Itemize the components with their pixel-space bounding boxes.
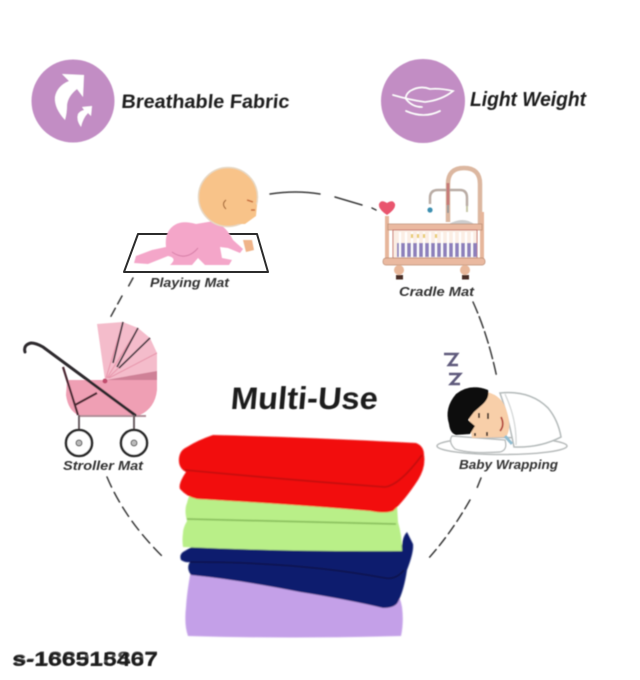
heading: multi-use: Multi-Use (229, 381, 379, 416)
red cloth (179, 435, 424, 512)
label: cradle mat: Cradle Mat (399, 284, 475, 299)
illustration: playing mat (124, 168, 268, 290)
green cloth (182, 490, 402, 551)
illustration: baby wrapping (437, 354, 567, 472)
feature: breathable fabric (32, 60, 291, 142)
heart (379, 201, 395, 215)
illustration: cradle mat (379, 168, 485, 299)
navy cloth (180, 532, 413, 608)
heading: breathable fabric: Breathable Fabric (121, 91, 291, 113)
heading: light weight: Light Weight (470, 89, 587, 111)
icon: breathable arrows (32, 60, 114, 142)
purple cloth (185, 565, 403, 638)
product code watermark: s-166515467 (12, 650, 158, 671)
label: baby wrapping: Baby Wrapping (459, 457, 558, 472)
label: playing mat: Playing Mat (150, 275, 230, 290)
label: stroller mat: Stroller Mat (63, 458, 144, 473)
icon: feather (381, 59, 465, 143)
sleeping baby (437, 354, 567, 454)
stroller (25, 322, 157, 456)
crawling baby (134, 168, 258, 265)
crib (379, 168, 485, 280)
product code watermark: s-188918807 (13, 649, 158, 670)
fabric stack (179, 435, 424, 638)
dashed circular connector (107, 192, 497, 560)
illustration: stroller mat (25, 322, 157, 473)
mat outline (124, 234, 268, 272)
feature: light weight (381, 59, 587, 143)
